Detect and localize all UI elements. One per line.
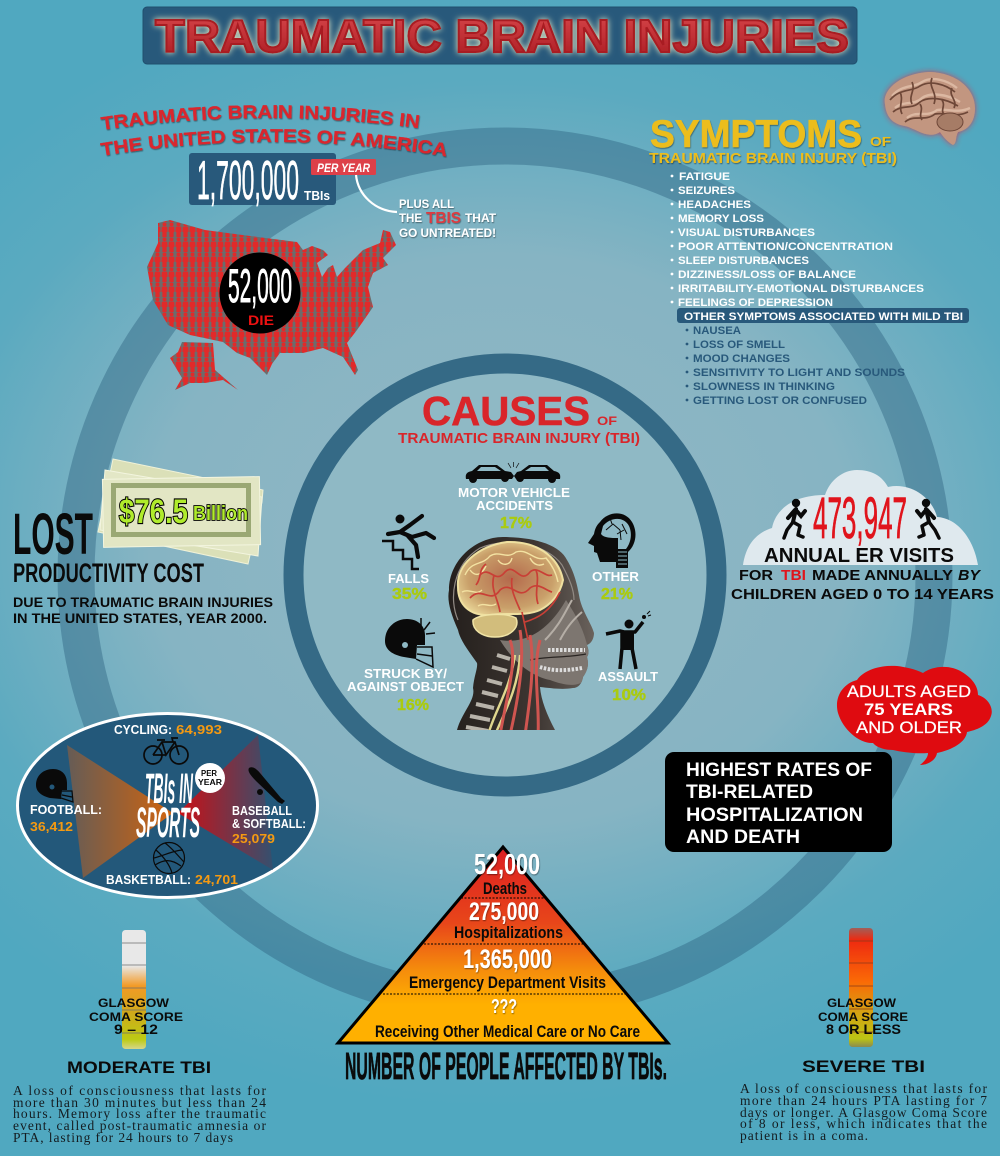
cause: motor vehicle accidents <box>458 462 570 532</box>
cause: falls: 35% <box>392 586 427 603</box>
description: MADE ANNUALLY <box>812 568 953 584</box>
description: BY <box>958 568 981 584</box>
description <box>740 1081 988 1143</box>
panel: tbis in sports: TBIs IN <box>145 765 193 813</box>
icon: runner left <box>784 499 805 538</box>
stat box: 1,700,000 TBIs <box>189 149 336 211</box>
description <box>731 568 994 603</box>
orange and red wedges <box>67 735 273 878</box>
untreated note: GO UNTREATED! <box>399 226 496 240</box>
sports heading <box>136 765 200 847</box>
heading: MODERATE TBI <box>67 1058 211 1077</box>
tier: emergency department visits: Emergency Department Visits <box>409 974 606 992</box>
cause: motor vehicle accidents: 17% <box>500 515 532 532</box>
cause: motor vehicle accidents: MOTOR VEHICLE <box>458 486 570 500</box>
icon: helmet <box>36 769 73 802</box>
description: patient is in a coma. <box>740 1128 868 1143</box>
mild symptom list: SENSITIVITY TO LIGHT AND SOUNDS <box>693 367 905 379</box>
sport: basketball: BASKETBALL: <box>106 872 191 887</box>
sport: cycling <box>114 722 222 764</box>
heading: TRAUMATIC BRAIN INJURY (TBI) <box>649 150 897 167</box>
description: A loss of consciousness that lasts for <box>13 1083 266 1098</box>
description: PTA, lasting for 24 hours to 7 days <box>13 1130 233 1145</box>
cause: struck by / against object: STRUCK BY/ <box>364 667 448 681</box>
sport: basketball <box>106 842 238 887</box>
description: days or longer. A Glasgow Coma Score <box>740 1105 987 1120</box>
icon: colliding cars <box>466 462 560 483</box>
callout: highest rates: AND DEATH <box>686 827 800 848</box>
gauge label: 8 OR LESS <box>826 1021 901 1037</box>
tier: other care: ??? <box>491 996 517 1018</box>
description <box>13 1083 266 1145</box>
gauge label <box>818 998 908 1037</box>
inner circle of causes <box>294 364 716 786</box>
icon: person falling on stairs <box>382 514 434 569</box>
cause: falls: FALLS <box>388 572 429 586</box>
untreated note: PLUS ALL <box>399 197 454 211</box>
description: event, called post-traumatic amnesia or <box>13 1118 266 1133</box>
cause: motor vehicle accidents: ACCIDENTS <box>476 499 553 513</box>
speech bubble: adults aged 75: 75 YEARS <box>864 700 953 719</box>
panel: symptoms <box>649 113 969 407</box>
sport: baseball: BASEBALL <box>232 804 292 818</box>
cause: other <box>588 513 639 603</box>
gauge label: GLASGOW <box>827 998 896 1010</box>
speech bubble: adults aged 75 <box>837 666 992 765</box>
tier: hospitalizations: Hospitalizations <box>454 924 563 942</box>
heading: OF <box>870 134 891 149</box>
arrow curve <box>356 175 397 212</box>
mild tbi bar: OTHER SYMPTOMS ASSOCIATED WITH MILD TBI <box>684 311 963 323</box>
main symptom list: VISUAL DISTURBANCES <box>678 227 815 239</box>
main symptom list: IRRITABILITY-EMOTIONAL DISTURBANCES <box>678 283 924 295</box>
main symptom list: HEADACHES <box>678 199 751 211</box>
stat box: 1,700,000 TBIs: 1,700,000 <box>197 149 299 211</box>
untreated note <box>399 197 497 240</box>
icon: bicycle <box>144 738 188 764</box>
description: of 8 or less, which indicates that the <box>740 1116 987 1131</box>
cause: struck by / against object <box>347 618 464 714</box>
icon: basketball <box>154 842 184 874</box>
mild symptom list: LOSS OF SMELL <box>693 339 785 351</box>
panel: united states <box>100 105 497 390</box>
curved heading: TRAUMATIC BRAIN INJURIES IN <box>100 105 420 131</box>
icon: head with brain and ladder <box>588 513 635 568</box>
per year circle: YEAR <box>198 778 222 787</box>
tier: other care <box>375 996 640 1041</box>
untreated note: THE <box>399 211 422 225</box>
heading <box>398 388 640 447</box>
description: IN THE UNITED STATES, YEAR 2000. <box>13 611 267 626</box>
main symptom list: FEELINGS OF DEPRESSION <box>678 297 833 309</box>
description: more than 24 hours PTA lasting for 7 <box>740 1093 987 1108</box>
gauge <box>849 928 873 1047</box>
cause: other: OTHER <box>592 570 639 584</box>
gauge label: COMA SCORE <box>818 1012 908 1024</box>
per year circle <box>195 763 225 793</box>
main symptom list: MEMORY LOSS <box>678 213 764 225</box>
description: A loss of consciousness that lasts for <box>740 1081 988 1096</box>
heading: SYMPTOMS <box>650 113 862 156</box>
panel: annual er visits <box>731 470 994 603</box>
sport: basketball: 24,701 <box>195 872 238 887</box>
tier: emergency department visits <box>409 944 606 992</box>
callout: highest rates: HOSPITALIZATION <box>686 805 863 826</box>
sport: cycling: 64,993 <box>176 722 222 737</box>
gauge label: 9 – 12 <box>114 1021 158 1037</box>
tier: deaths <box>474 849 540 898</box>
panel: tbis in sports: SPORTS <box>136 799 200 847</box>
callout: highest rates: HIGHEST RATES OF <box>686 760 872 781</box>
heading: productivity cost: PRODUCTIVITY COST <box>13 558 204 588</box>
cause: struck by / against object: AGAINST OBJECT <box>347 680 464 694</box>
heading: lost: LOST <box>13 502 93 567</box>
description: FOR <box>739 568 774 584</box>
heading: CAUSES <box>422 388 590 434</box>
main symptom list <box>671 171 924 309</box>
deaths circle <box>220 252 300 334</box>
main symptom list: POOR ATTENTION/CONCENTRATION <box>678 241 893 253</box>
er visits label: ANNUAL ER VISITS <box>764 545 954 567</box>
outer ring <box>76 146 934 1004</box>
gauge <box>122 930 146 1049</box>
sport: football <box>30 769 102 834</box>
tier: hospitalizations <box>454 898 563 942</box>
speech bubble: adults aged 75: ADULTS AGED <box>847 682 971 701</box>
mild symptom list <box>686 325 905 407</box>
tier: emergency department visits: 1,365,000 <box>463 944 552 974</box>
cause: assault: 10% <box>612 687 646 704</box>
sport: football: 36,412 <box>30 819 73 834</box>
stat box: 1,700,000 TBIs: TBIs <box>304 188 330 203</box>
amount: $76.5 <box>119 493 188 531</box>
icon: person throwing fist <box>606 611 651 669</box>
callout: highest rates <box>665 752 892 852</box>
deaths circle: 52,000 <box>228 259 292 312</box>
untreated note: TBIS <box>426 210 461 227</box>
panel: causes <box>347 388 658 735</box>
sport: baseball: & SOFTBALL: <box>232 817 306 831</box>
mild symptom list: SLOWNESS IN THINKING <box>693 381 835 393</box>
description: CHILDREN AGED 0 TO 14 YEARS <box>731 587 994 603</box>
cause: other: 21% <box>601 586 633 603</box>
mild symptom list: MOOD CHANGES <box>693 353 790 365</box>
icon: runner right <box>917 499 939 538</box>
heading: SEVERE TBI <box>802 1057 925 1076</box>
curved heading line two: THE UNITED STATES OF AMERICA <box>100 129 447 158</box>
gauge label <box>89 998 183 1037</box>
cause: assault: ASSAULT <box>598 670 658 684</box>
heading: OF <box>597 414 617 428</box>
description: more than 30 minutes but less than 24 <box>13 1095 266 1110</box>
heading: TRAUMATIC BRAIN INJURY (TBI) <box>398 430 640 447</box>
pyramid chart <box>338 847 668 1043</box>
panel: tbis in sports <box>18 714 318 898</box>
description: TBI <box>781 568 806 584</box>
callout: highest rates: TBI-RELATED <box>686 782 813 803</box>
sport: football: FOOTBALL: <box>30 803 102 817</box>
description: hours. Memory loss after the traumatic <box>13 1106 266 1121</box>
deaths circle: DIE <box>248 312 274 328</box>
panel: lost productivity <box>13 459 273 626</box>
panel: severe tbi <box>740 928 988 1143</box>
tier: hospitalizations: 275,000 <box>469 898 539 926</box>
tier: deaths: 52,000 <box>474 849 540 881</box>
main symptom list: DIZZINESS/LOSS OF BALANCE <box>678 269 856 281</box>
mild symptom list: NAUSEA <box>693 325 741 337</box>
untreated note: THAT <box>465 211 497 225</box>
gauge label: GLASGOW <box>98 998 169 1010</box>
tier: other care: Receiving Other Medical Care or No Care <box>375 1023 640 1041</box>
panel: moderate tbi <box>13 930 266 1145</box>
sport: cycling: CYCLING: <box>114 722 172 737</box>
icon: stack of bills <box>98 459 263 564</box>
cause: falls <box>382 514 434 603</box>
per year circle: PER <box>201 769 217 778</box>
sport: baseball: 25,079 <box>232 831 275 846</box>
speech bubble: adults aged 75: AND OLDER <box>856 718 962 737</box>
icon: bat and ball <box>248 767 285 804</box>
icon: head and brain anatomy <box>448 537 594 735</box>
description <box>13 595 273 626</box>
sport: baseball <box>232 767 306 846</box>
amount <box>119 493 248 531</box>
description: DUE TO TRAUMATIC BRAIN INJURIES <box>13 595 273 610</box>
per year badge: PER YEAR <box>317 161 370 175</box>
mild symptom list: GETTING LOST OR CONFUSED <box>693 395 867 407</box>
main symptom list: FATIGUE <box>679 171 730 183</box>
cloud <box>743 470 978 565</box>
cause: struck by / against object: 16% <box>397 697 429 714</box>
icon: football helmet with impact <box>385 618 435 667</box>
amount: Billion <box>193 503 248 525</box>
brain <box>458 542 563 615</box>
title banner: TRAUMATIC BRAIN INJURIES <box>155 10 849 62</box>
tier: deaths: Deaths <box>483 880 527 898</box>
map of people <box>147 220 396 390</box>
icon: brain photo <box>885 72 975 145</box>
gauge label: COMA SCORE <box>89 1012 183 1024</box>
main symptom list: SLEEP DISTURBANCES <box>678 255 809 267</box>
main symptom list: SEIZURES <box>678 185 735 197</box>
cause: assault <box>598 611 658 704</box>
